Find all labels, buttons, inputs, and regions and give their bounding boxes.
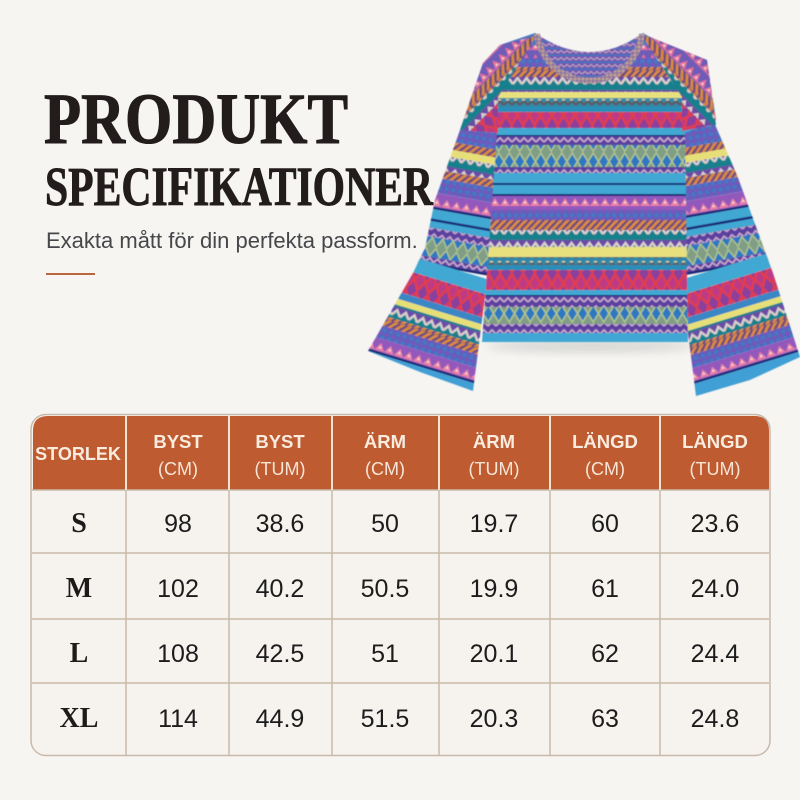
row S: 23.6 [691, 510, 739, 538]
row XL: 24.8 [691, 705, 739, 733]
header row: LÄNGD [572, 431, 638, 452]
row L: 62 [591, 640, 619, 668]
row M: 50.5 [361, 575, 409, 603]
right sleeve [682, 124, 800, 397]
header row: (TUM) [255, 459, 305, 479]
row XL: 20.3 [470, 705, 518, 733]
row M: 40.2 [256, 575, 304, 603]
left shoulder [460, 36, 535, 134]
header row: BYST [153, 431, 203, 452]
row M: M [66, 573, 92, 604]
row S: 50 [371, 510, 399, 538]
header row: (CM) [365, 459, 405, 479]
subtitle: Exakta mått för din perfekta passform. [46, 228, 418, 253]
row M [66, 573, 739, 604]
title line: Produkt: PRODUKT [44, 79, 348, 159]
accent rule [46, 273, 95, 275]
header row: BYST [255, 431, 305, 452]
row XL: 51.5 [361, 705, 409, 733]
row XL: XL [60, 703, 98, 734]
header row: (TUM) [690, 459, 740, 479]
row M: 24.0 [691, 575, 739, 603]
title line: Specifikationer: SPECIFIKATIONER [45, 156, 434, 217]
row L: 42.5 [256, 640, 304, 668]
row S [71, 508, 739, 539]
row XL: 114 [158, 705, 198, 733]
table header band [33, 416, 769, 490]
row L: 20.1 [470, 640, 518, 668]
row L [70, 638, 739, 669]
row S: 60 [591, 510, 619, 538]
grid [32, 490, 769, 755]
sweater body [450, 30, 730, 342]
row S: S [71, 508, 87, 539]
row M: 61 [591, 575, 619, 603]
row XL [60, 703, 739, 734]
table frame [31, 414, 770, 756]
header row: ÄRM [473, 431, 515, 452]
row L: L [70, 638, 88, 669]
row XL: 63 [591, 705, 619, 733]
header row: (CM) [585, 459, 625, 479]
row L: 108 [157, 640, 199, 668]
header row: ÄRM [364, 431, 406, 452]
header row: (TUM) [469, 459, 519, 479]
row M: 102 [157, 575, 199, 603]
row S: 38.6 [256, 510, 304, 538]
title [44, 79, 434, 217]
header row: (CM) [158, 459, 198, 479]
header row: STORLEK [35, 444, 121, 464]
size table [31, 414, 770, 756]
row S: 98 [164, 510, 192, 538]
row M: 19.9 [470, 575, 518, 603]
sweater image [368, 32, 800, 397]
left sleeve [368, 129, 499, 392]
header row: LÄNGD [682, 431, 748, 452]
neck rib [537, 34, 642, 80]
row L: 51 [371, 640, 399, 668]
neck inner [540, 36, 639, 78]
row XL: 44.9 [256, 705, 304, 733]
right shoulder [644, 36, 717, 132]
header row [35, 431, 748, 479]
row S: 19.7 [470, 510, 518, 538]
row L: 24.4 [691, 640, 739, 668]
